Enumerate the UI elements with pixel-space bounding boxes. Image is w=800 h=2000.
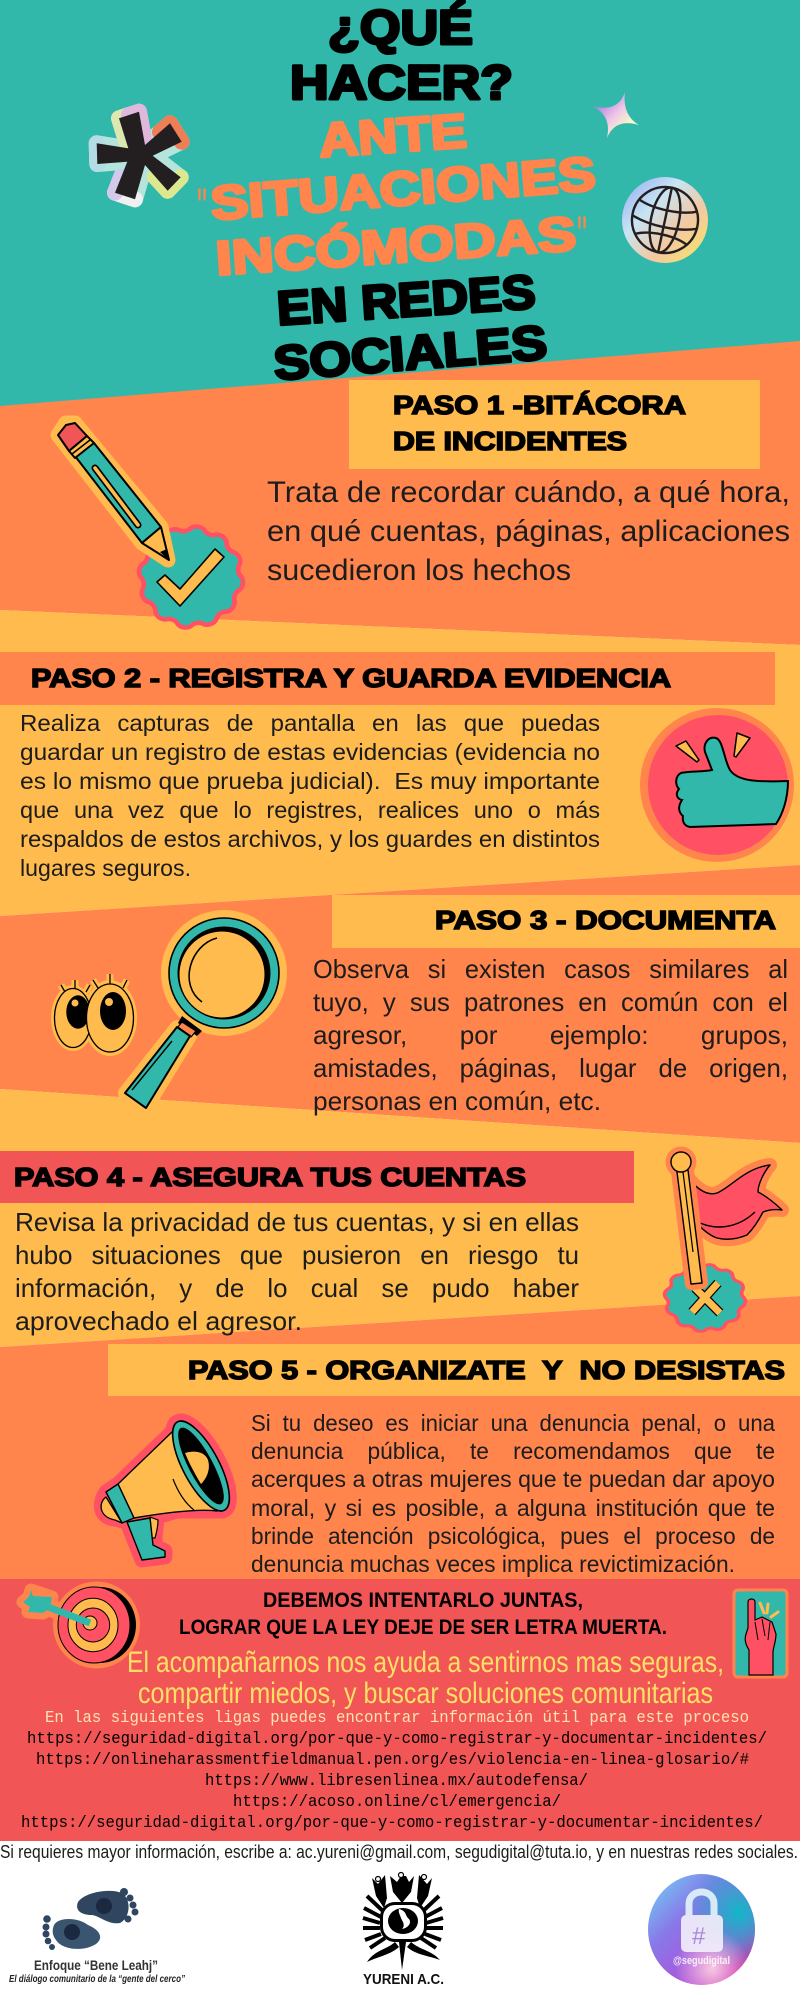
- text: Yureni: YURENI A.C.: [363, 1971, 444, 1988]
- text: acompañarnos: [127, 1646, 724, 1710]
- icon: magnifying glass: [125, 910, 287, 1108]
- heading: paso 4: PASO 4 - ASEGURA TUS CUENTAS: [14, 1162, 526, 1192]
- heading box: paso 2: [0, 652, 775, 705]
- title: [197, 1, 598, 391]
- background: paso 2 yellow band: [0, 610, 800, 916]
- title: SITUACIONES: [209, 148, 598, 231]
- heading: paso 5: PASO 5 - ORGANIZATE Y NO DESISTAS: [188, 1355, 785, 1385]
- heading: debemos intentarlo: [179, 1589, 667, 1639]
- text: paso 3: personas en común, etc.: [313, 1086, 601, 1116]
- icon: footprints: [42, 1888, 138, 1950]
- panel: paso 2: [0, 652, 794, 881]
- text: paso 3: amistades, páginas, lugar de origen,: [313, 1053, 788, 1083]
- text: links: https://onlineharassmentfieldmanual.pen.org/es/violencia-en-linea-glosario/#: [36, 1751, 749, 1770]
- background: paso 1 orange band: [0, 341, 800, 645]
- icon: pencil: [58, 423, 169, 560]
- text: paso 2: lugares seguros.: [20, 855, 191, 881]
- heading: paso 1: DE INCIDENTES: [393, 426, 627, 456]
- text: links intro: En las siguientes ligas puedes encontrar información útil para este proceso: [45, 1709, 749, 1728]
- heading box: paso 1: [349, 380, 760, 469]
- panel: paso 3: [51, 895, 800, 1116]
- text: paso 5: denuncia pública, te recomendamos que te: [251, 1438, 775, 1464]
- logo: segudigital lock: @segudigital: [673, 1955, 730, 1967]
- text: paso 1: Trata de recordar cuándo, a qué hora,: [267, 476, 790, 509]
- background: teal header: [0, 0, 800, 420]
- icon: sparkle star: [592, 92, 639, 138]
- text: tagline: El diálogo comunitario de la “gente del cerco”: [9, 1974, 185, 1985]
- panel: paso 5: [101, 1344, 800, 1577]
- text: paso 1: en qué cuentas, páginas, aplicaciones: [267, 515, 790, 548]
- text: paso 2: es lo mismo que prueba judicial). Es muy importante: [20, 768, 600, 794]
- text: paso 3: [313, 954, 788, 1116]
- text: paso 5: brinde atención psicológica, pues el proceso de: [251, 1523, 775, 1549]
- text: paso 3: tuyo, y sus patrones en común con el: [313, 987, 788, 1017]
- title: HACER?: [290, 57, 513, 110]
- icon: globe: [622, 177, 708, 263]
- logo: Yureni A.C.: [363, 1872, 444, 1988]
- panel: paso 1: [58, 380, 790, 628]
- text: paso 3: agresor, por ejemplo: grupos,: [313, 1020, 788, 1050]
- icon: check badge: [139, 526, 243, 628]
- text: paso 2: respaldos de estos archivos, y los guardes en distintos: [20, 826, 600, 852]
- logo: segudigital lock: [648, 1874, 755, 1985]
- background: closing red panel: [0, 1579, 800, 1841]
- icon: thumbs up: [640, 708, 794, 862]
- panel: closing message: [21, 1582, 787, 1833]
- title: ": [197, 176, 207, 239]
- text: links: [21, 1730, 767, 1833]
- heading: debemos intentarlo: DEBEMOS INTENTARLO JUNTAS,: [263, 1589, 583, 1612]
- heading: paso 1: [393, 390, 686, 456]
- heading: debemos intentarlo: LOGRAR QUE LA LEY DEJE DE SER LETRA MUERTA.: [179, 1616, 667, 1639]
- text: links: https://acoso.online/cl/emergencia/: [233, 1793, 561, 1812]
- text: paso 1: [267, 476, 790, 587]
- text: paso 4: información, y de lo cual se pudo haber: [15, 1273, 579, 1303]
- text: paso 5: Si tu deseo es iniciar una denuncia penal, o una: [251, 1410, 775, 1436]
- title: ANTE: [317, 105, 468, 168]
- background: paso 3 orange band: [0, 865, 800, 1143]
- icon: flag with x badge: [665, 1146, 782, 1331]
- text: paso 4: hubo situaciones que pusieron en riesgo tu: [15, 1240, 579, 1270]
- text: paso 3: Observa si existen casos similares al: [313, 954, 788, 984]
- text: paso 2: que una vez que lo registres, realices uno o más: [20, 797, 600, 823]
- text: paso 4: Revisa la privacidad de tus cuentas, y si en ellas: [15, 1207, 579, 1237]
- title: ¿QUÉ: [328, 1, 473, 55]
- heading: paso 3: PASO 3 - DOCUMENTA: [435, 905, 776, 935]
- icon: holographic asterisk: [97, 112, 182, 199]
- text: paso 4: aprovechado el agresor.: [15, 1306, 302, 1336]
- title: ": [577, 204, 587, 267]
- text: paso 5: acerques a otras mujeres que te puedan dar apoyo: [251, 1466, 775, 1492]
- heading: paso 2: PASO 2 - REGISTRA Y GUARDA EVIDENCIA: [31, 663, 671, 693]
- heading box: paso 4: [0, 1151, 634, 1203]
- icon: target with arrow: [23, 1582, 140, 1668]
- text: paso 2: guardar un registro de estas evidencias (evidencia no: [20, 739, 600, 765]
- title: INCÓMODAS: [214, 206, 578, 286]
- text: Enfoque Bene Leahj: Enfoque “Bene Leahj”: [34, 1957, 158, 1973]
- logo: Enfoque Bene Leahj: [9, 1888, 185, 1985]
- icon: Yureni emblem: [363, 1872, 443, 1970]
- heading: paso 1: PASO 1 -BITÁCORA: [393, 390, 686, 420]
- logo: segudigital lock: #: [692, 1923, 706, 1950]
- text: paso 5: [251, 1410, 775, 1577]
- text: links: https://www.libresenlinea.mx/autodefensa/: [205, 1772, 588, 1791]
- text: paso 2: [20, 710, 600, 881]
- heading box: paso 5: [108, 1344, 800, 1396]
- icon: eyes: [51, 974, 137, 1056]
- text: paso 1: sucedieron los hechos: [267, 554, 571, 587]
- background: paso 4 yellow band: [0, 1089, 800, 1347]
- heading box: paso 3: [332, 895, 800, 948]
- icon: megaphone: [101, 1413, 240, 1560]
- title: EN REDES: [275, 266, 537, 336]
- text: paso 5: denuncia muchas veces implica revictimización.: [251, 1551, 735, 1577]
- text: paso 4: [15, 1207, 579, 1336]
- panel: paso 4: [0, 1146, 782, 1336]
- text: paso 2: Realiza capturas de pantalla en las que puedas: [20, 710, 600, 736]
- background: paso 5 orange band: [0, 1296, 800, 1580]
- text: paso 5: moral, y si es posible, a alguna institución que te: [251, 1495, 775, 1521]
- title: SOCIALES: [272, 317, 549, 391]
- icon: hand card: [734, 1590, 787, 1677]
